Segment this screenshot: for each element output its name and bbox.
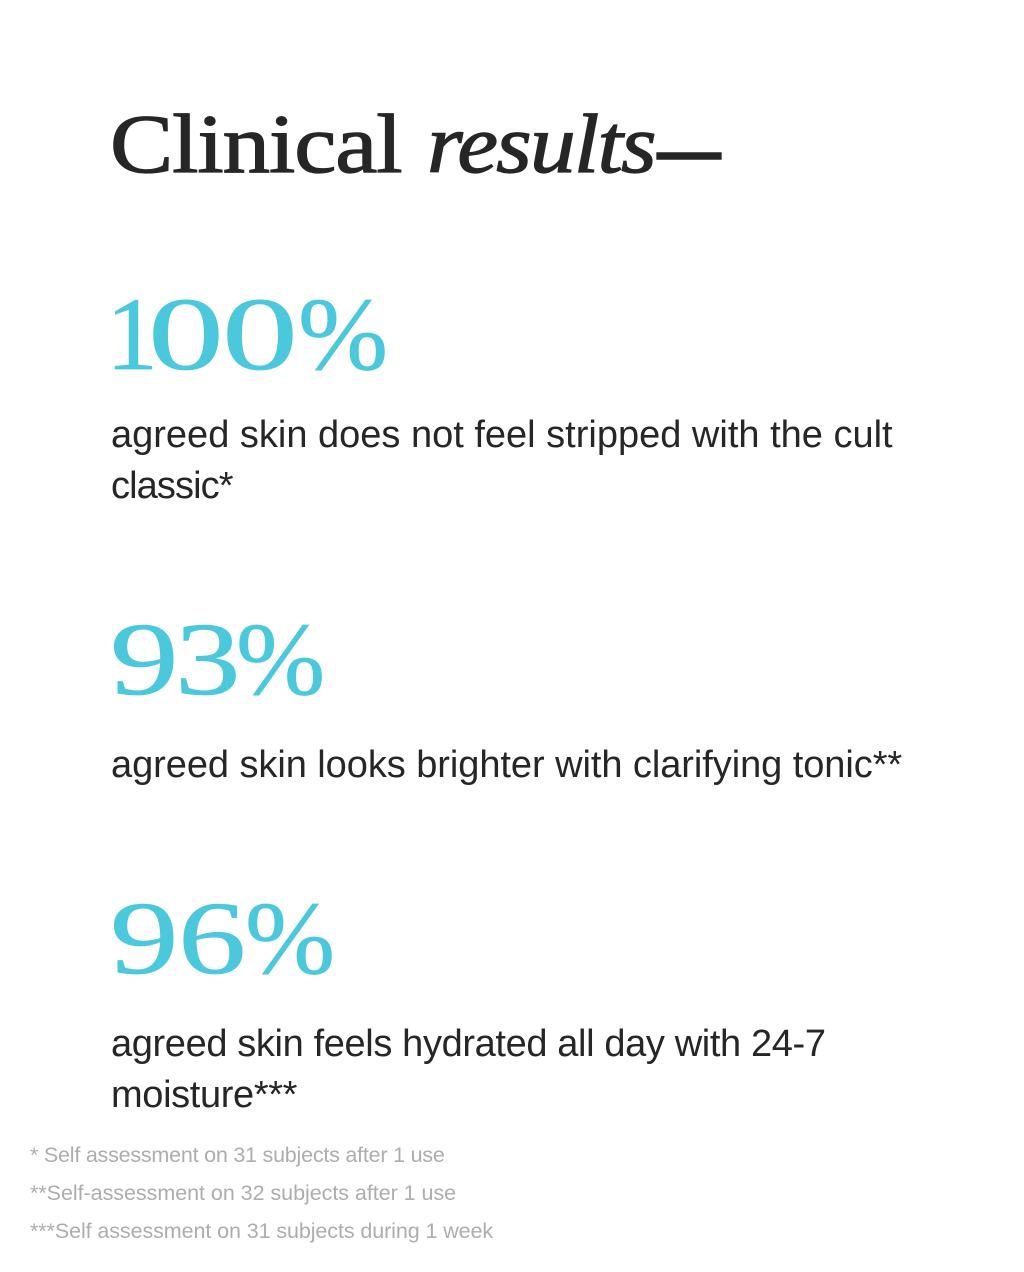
stat: 100%: 1 — [106, 277, 158, 392]
title — [110, 98, 722, 191]
stat description: 93%: agreed skin looks brighter with clarifying tonic** — [111, 744, 902, 786]
stat: 96%: 6 — [178, 881, 246, 996]
stat: 93%: 3 — [175, 602, 241, 717]
title: results — [427, 98, 655, 191]
title: — — [659, 117, 719, 183]
stat: 100%: 0 — [222, 277, 298, 392]
stat: 93%: 9 — [110, 602, 178, 717]
stat: 100% — [106, 277, 388, 392]
stat description: 96%: agreed skin feels hydrated all day with 24-7 — [111, 1023, 826, 1065]
stat: 96%: % — [245, 881, 335, 996]
stat: 100%: % — [298, 277, 388, 392]
stat: 100%: 0 — [148, 277, 224, 392]
stat description: 100%: classic* — [111, 465, 233, 507]
stat description: 100% — [111, 414, 893, 507]
stat: 96%: 9 — [110, 881, 178, 996]
stat description: 96%: moisture*** — [111, 1074, 297, 1116]
footnote 3: ***Self assessment on 31 subjects during 1 week — [30, 1219, 493, 1243]
stat description: 100%: agreed skin does not feel stripped with the cult — [111, 414, 893, 456]
footnote 1: * Self assessment on 31 subjects after 1 use — [30, 1143, 445, 1167]
stat: 93% — [110, 602, 325, 717]
footnote 2: **Self-assessment on 32 subjects after 1 use — [30, 1181, 456, 1205]
title: Clinical — [110, 98, 401, 191]
stat: 96% — [110, 881, 335, 996]
stat: 93%: % — [236, 602, 325, 717]
stat description: 96% — [111, 1023, 826, 1116]
